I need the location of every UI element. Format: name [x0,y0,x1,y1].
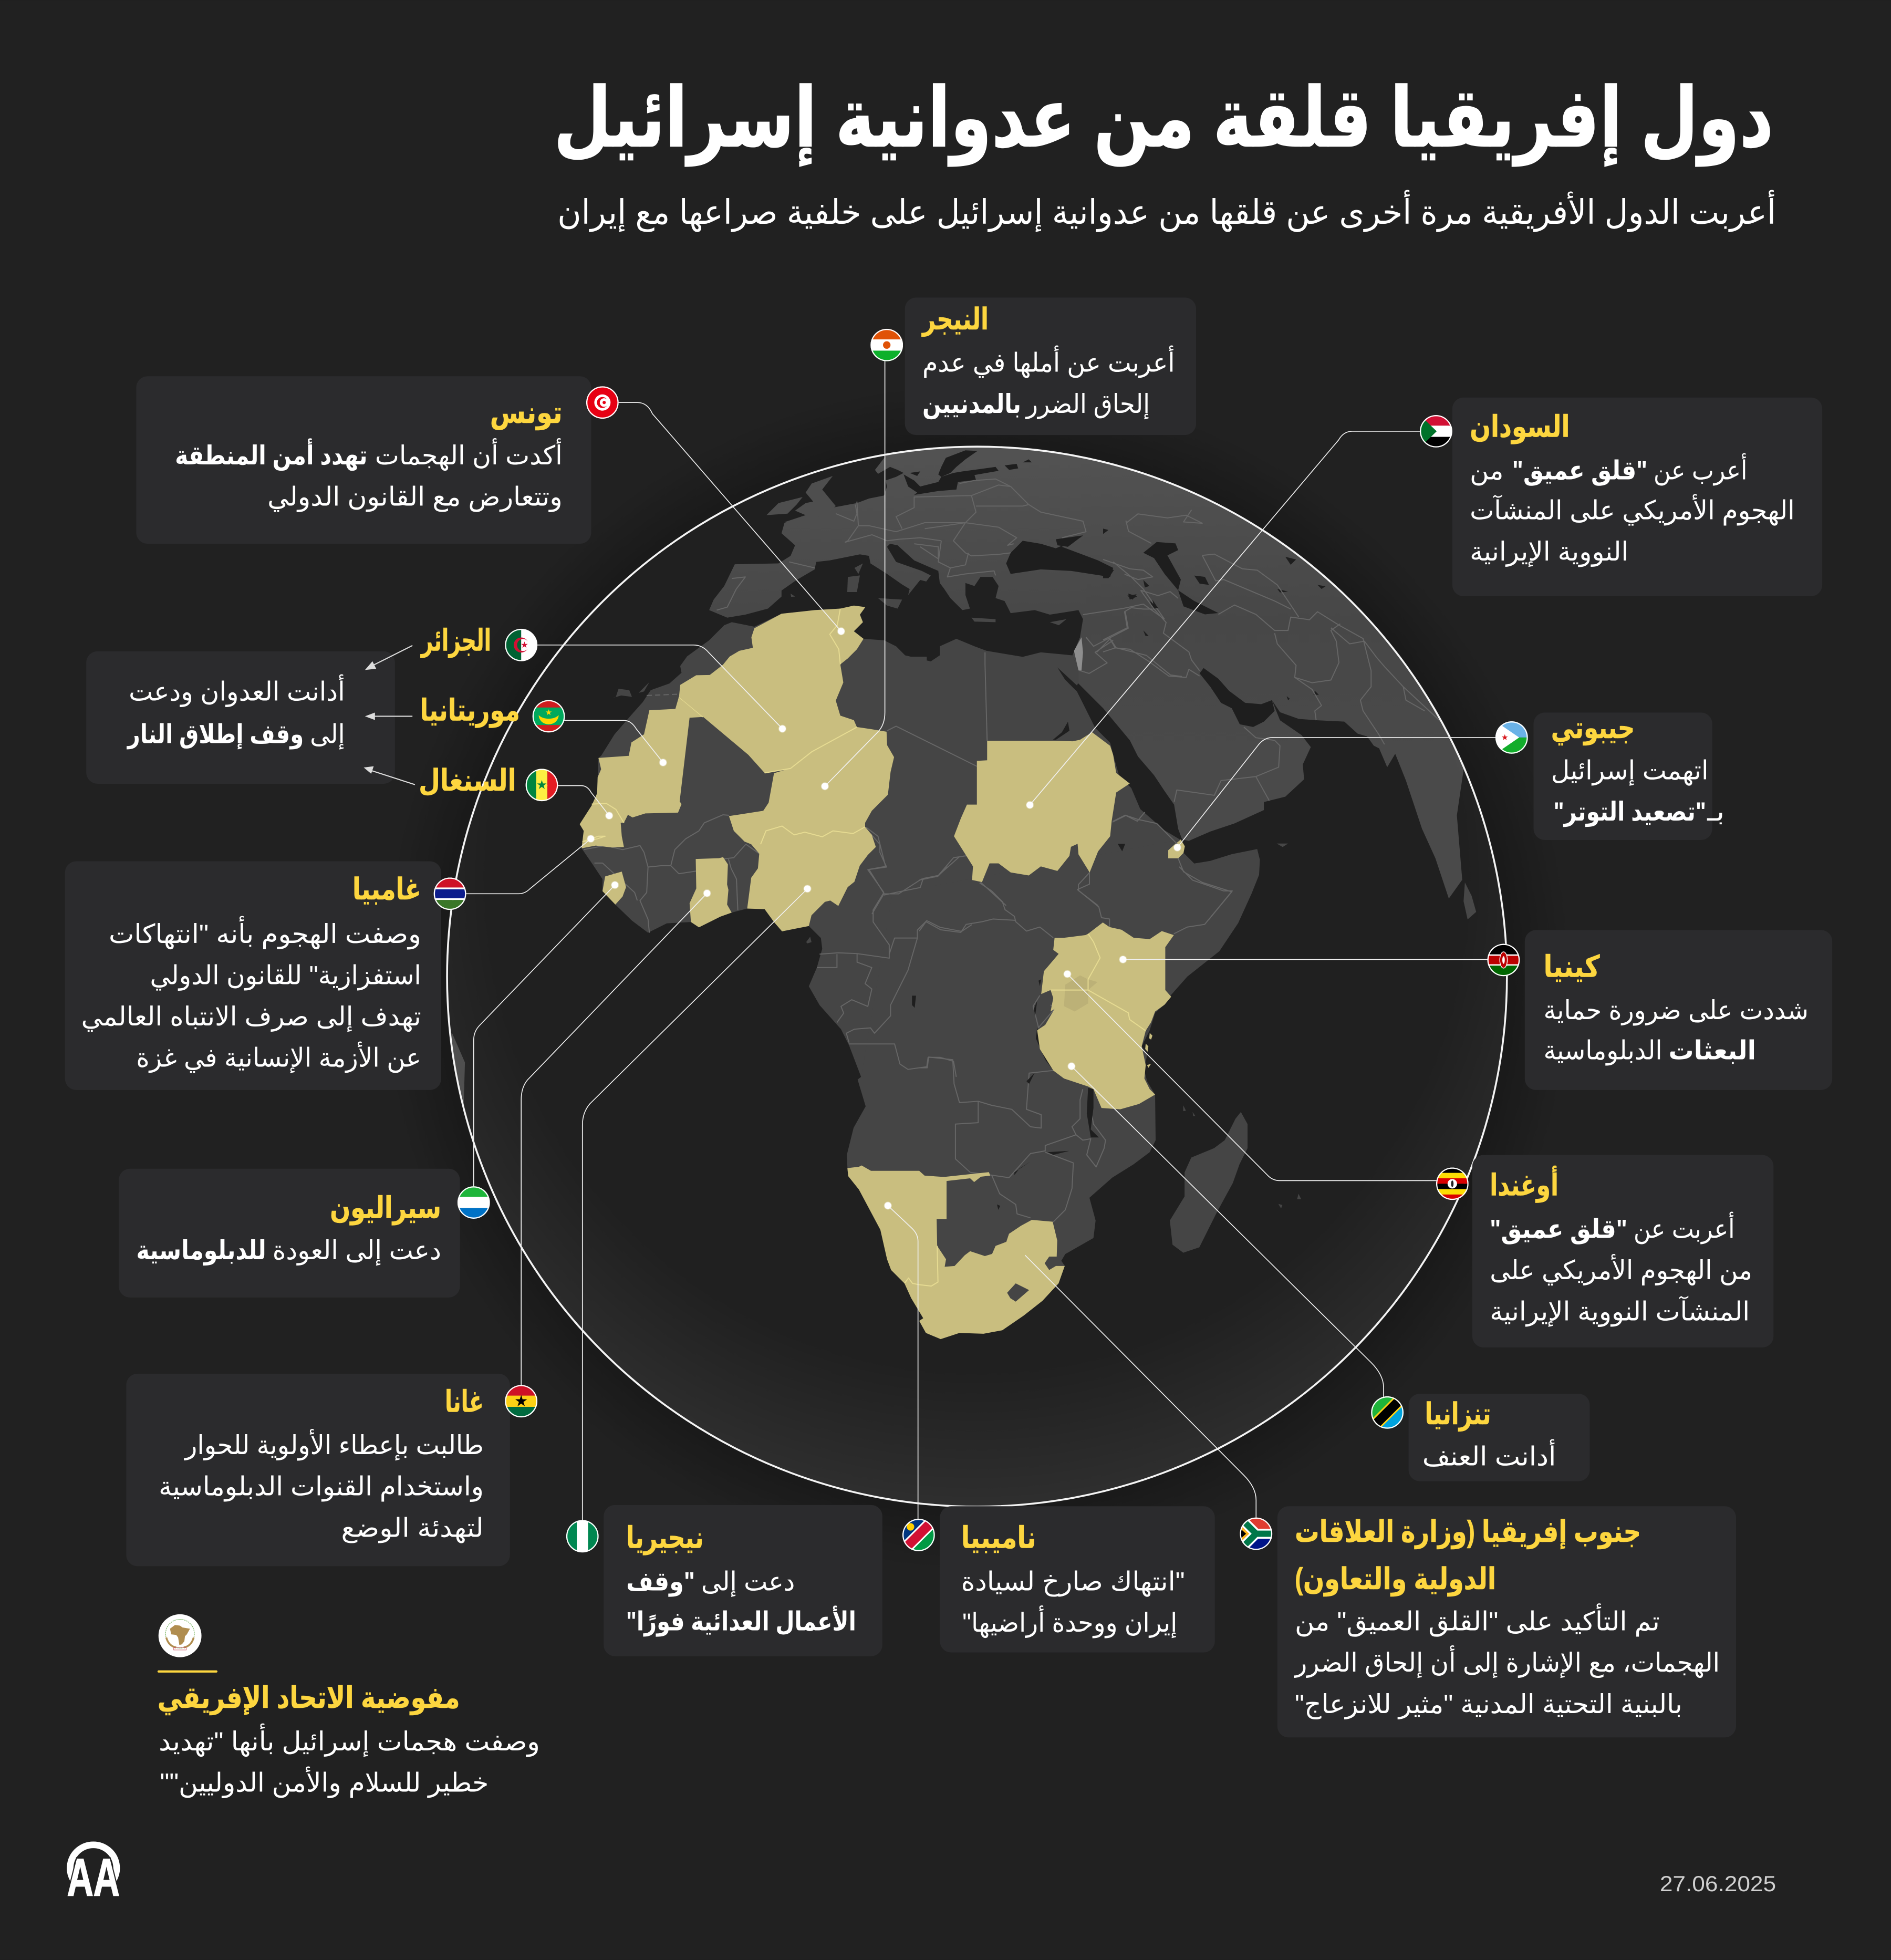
heading: Kenya: كينيا [1544,950,1600,983]
Lesotho [1007,1283,1029,1302]
body: Ghana: لتهدئة الوضع [341,1513,484,1543]
body: Gambia: تهدف إلى صرف الانتباه العالمي [81,1002,421,1032]
panel: Djibouti [1495,711,1725,840]
heading: Ghana: غانا [445,1385,484,1418]
body: Niger: أعربت عن أملها في عدم [922,346,1175,379]
land: Middle East and Asia [1078,507,1464,898]
heading: Djibouti: جيبوتي [1551,711,1635,745]
heading: Namibia: ناميبيا [961,1521,1036,1555]
heading: Algeria: الجزائر [420,624,491,658]
land: Europe and Turkey [709,448,1087,670]
heading: Gambia: غامبيا [352,873,421,906]
lake [912,995,916,1008]
highlighted: Namibia and South Africa [847,1166,1065,1339]
body: Nigeria: الأعمال العدائية فورًا" [626,1605,856,1637]
panel: Algeria, Mauritania, Senegal shared statement [86,624,565,801]
land: Atlantic islands [612,682,812,943]
borders between West African countries [583,697,865,844]
land: Central and Southern Africa [847,839,1260,1339]
body: Sierra Leone: للدبلوماسية [136,1236,266,1266]
flag: Senegal [526,769,559,801]
body: Uganda [1490,1212,1752,1328]
heading: Tunisia: تونس [490,396,563,430]
body: Uganda: "قلق عميق" [1490,1215,1627,1245]
body: Gambia: استفزازية" للقانون الدولي [150,961,421,991]
panel: South Africa [1240,1506,1736,1737]
body: Djibouti: "تصعيد التوتر" [1554,797,1706,827]
body: Kenya [1544,995,1809,1065]
panel: Niger [870,297,1196,435]
body: Sudan: النووية الإيرانية [1470,537,1628,567]
flag: Mauritania [533,700,565,732]
highlighted: Djibouti [1168,839,1185,858]
arrows to statement [363,646,415,785]
body: African Union Commission [159,1723,540,1799]
body: Sudan: "قلق عميق" [1512,455,1647,486]
flag: Sudan [1420,415,1452,448]
flag: Algeria [505,629,537,661]
body: Sierra Leone [136,1236,441,1266]
flag: Kenya [1487,943,1520,977]
seas: Black Sea [1006,535,1158,609]
body: Uganda: المنشآت النووية الإيرانية [1490,1296,1750,1328]
panel: Sierra Leone [119,1169,490,1298]
Lake Victoria [1064,976,1097,1011]
body: African Union Commission: خطير للسلام والأمن الدوليين"" [160,1767,489,1799]
location dots [587,628,1181,1209]
borders: Asia [1103,510,1441,802]
borders: Tunisia/Algeria and Algeria/Niger [765,609,857,773]
panel: Uganda [1436,1155,1773,1347]
highlighted: Sudan [954,732,1130,882]
borders: Central and Southern Africa [919,867,1232,1222]
land: Britain and Ireland [766,476,836,527]
body: Niger: بالمدنيين [922,389,1021,420]
divider line [158,1671,217,1673]
panel: Gambia [65,861,466,1090]
heading: Tanzania: تنزانيا [1425,1397,1491,1432]
body: Kenya: البعثات [1668,1035,1756,1065]
flag: Nigeria [566,1520,599,1552]
seas: Baltic and lakes [903,450,1032,495]
heading: Uganda: أوغندا [1490,1166,1558,1204]
body: Uganda: أعربت عن [1634,1212,1735,1245]
body: Gambia [81,916,421,1073]
land: Madagascar [1170,1112,1248,1253]
land: North Africa [687,607,1179,894]
body: Uganda: من الهجوم الأمريكي على [1490,1254,1752,1286]
Israel highlight [1074,637,1083,670]
seas: Caspian and Persian Gulf [1103,528,1326,727]
body: Gambia: عن الأزمة الإنسانية في غزة [136,1042,421,1073]
land: Mediterranean islands [791,563,1066,625]
panel: Sudan [1420,398,1822,596]
body: Tunisia: أكدت أن الهجمات [375,438,563,471]
flag: South Africa [1240,1518,1272,1550]
borders: West and Central Africa [584,815,972,1077]
body: Niger [922,346,1175,420]
body: Niger: إلحاق الضرر [1025,389,1150,420]
body: South Africa [1293,1603,1720,1719]
flag: Tunisia [586,386,619,419]
body: South Africa: تم التأكيد على "القلق العميق" من [1295,1603,1660,1637]
flag: Sierra Leone [458,1186,490,1219]
body: Sudan: الهجوم الأمريكي على المنشآت [1470,494,1795,526]
body: Gambia: وصفت الهجوم بأنه "انتهاكات [109,916,421,950]
borders between Kenya, Uganda, Tanzania [1051,934,1146,1031]
heading: Mauritania: موريتانيا [420,694,520,728]
heading: Nigeria: نيجيريا [626,1521,704,1555]
flag: Niger [870,329,903,362]
heading: Senegal: السنغال [419,764,516,797]
body: Nigeria: "وقف [626,1567,695,1598]
body: Tunisia: تهدد أمن المنطقة [175,438,368,471]
body: South Africa: الهجمات، مع الإشارة إلى أن إلحاق الضرر [1293,1645,1720,1678]
body: shared statement [126,674,345,750]
lakes: Central and Southern Africa [997,979,1099,1210]
body: Namibia: "انتهاك صارخ لسيادة [961,1567,1185,1598]
globe map [446,445,1508,1507]
lakes: Nasser and Tana [1053,722,1125,852]
Western Sahara dashed border [647,694,679,696]
subtitle: أعربت الدول الأفريقية مرة أخرى عن قلقها من عدوانية إسرائيل على خلفية صراعها مع إيران [557,190,1776,232]
land: West Africa [580,657,927,1077]
body: Tunisia [175,438,563,512]
logo: Anadolu Agency: AA [67,1849,120,1907]
body: Kenya: الدبلوماسية [1544,1035,1663,1065]
body: Ghana: واستخدام القنوات الدبلوماسية [159,1472,484,1502]
flag: Gambia [434,877,466,910]
leader lines [450,345,1511,1536]
body: South Africa: بالبنية التحتية المدنية "مثير للانزعاج" [1295,1689,1682,1719]
body: Nigeria: دعت إلى [701,1567,795,1598]
globe ring [447,447,1507,1507]
land: small Indian Ocean islands [1183,1105,1301,1208]
land: South America edge [445,1031,465,1113]
body: Namibia [961,1567,1185,1638]
heading: South Africa: جنوب إفريقيا (وزارة العلاقات [1295,1515,1641,1550]
flag: Ghana [505,1385,537,1418]
borders: North and East Africa [866,652,1145,914]
icon: African Union emblem [159,1614,202,1657]
body: shared statement: أدانت العدوان ودعت [129,674,345,707]
body: Sudan: من [1470,455,1503,485]
body: Sudan [1470,453,1795,567]
body: Kenya: شددت على ضرورة حماية [1544,995,1809,1026]
body: Djibouti: اتهمت إسرائيل [1551,755,1709,786]
body: Djibouti: بـ [1707,797,1725,826]
panel: Tunisia [136,376,619,544]
body: Djibouti [1551,755,1725,827]
body: shared statement: إلى [310,719,345,750]
land: Socotra [1277,844,1288,847]
body: Tanzania: أدانت العنف [1422,1439,1556,1471]
body: Tunisia: وتتعارض مع القانون الدولي [267,482,563,512]
heading: South Africa [1295,1515,1641,1597]
borders: Horn of Africa [1113,815,1232,919]
body: Namibia: إيران ووحدة أراضيها" [962,1605,1177,1638]
land: Sri Lanka [1463,883,1476,919]
body: Nigeria [626,1567,856,1637]
heading: South Africa: الدولية والتعاون) [1295,1562,1496,1597]
flag: Uganda [1436,1167,1469,1200]
panel: Kenya [1487,930,1832,1090]
heading: Sudan: السودان [1470,410,1570,444]
flag: Tanzania [1371,1396,1404,1429]
body: Sudan: أعرب عن [1654,453,1747,485]
border Namibia and South Africa [905,1246,938,1286]
body: Ghana [159,1429,484,1543]
highlighted: West African countries [580,697,894,931]
date: 27.06.2025 [1660,1871,1776,1896]
highlighted: Algeria and Tunisia [679,606,865,773]
body: Ghana: طالبت بإعطاء الأولوية للحوار [183,1429,484,1461]
flag: Djibouti [1495,721,1528,754]
body: Sierra Leone: دعت إلى العودة [273,1236,441,1266]
heading: Niger: النيجر [921,303,989,337]
highlighted: Kenya, Uganda, Tanzania [1037,922,1174,1109]
panel: African Union Commission [158,1614,540,1799]
logo: Anadolu Agency: AA [67,1849,120,1907]
panel: Ghana [126,1374,537,1566]
logo: Anadolu Agency [67,1845,120,1907]
heading: African Union Commission: مفوضية الاتحاد الإفريقي [158,1681,460,1716]
flag: Namibia [902,1519,935,1551]
body: shared statement: وقف إطلاق النار [126,719,304,750]
heading: Sierra Leone: سيراليون [330,1191,441,1226]
panel: Tanzania [1371,1394,1590,1481]
panel: Nigeria [566,1505,882,1656]
borders: Europe and Levant [716,479,1182,677]
panel: Namibia [902,1506,1215,1653]
body: African Union Commission: وصفت هجمات إسرائيل بأنها "تهديد [159,1723,540,1757]
